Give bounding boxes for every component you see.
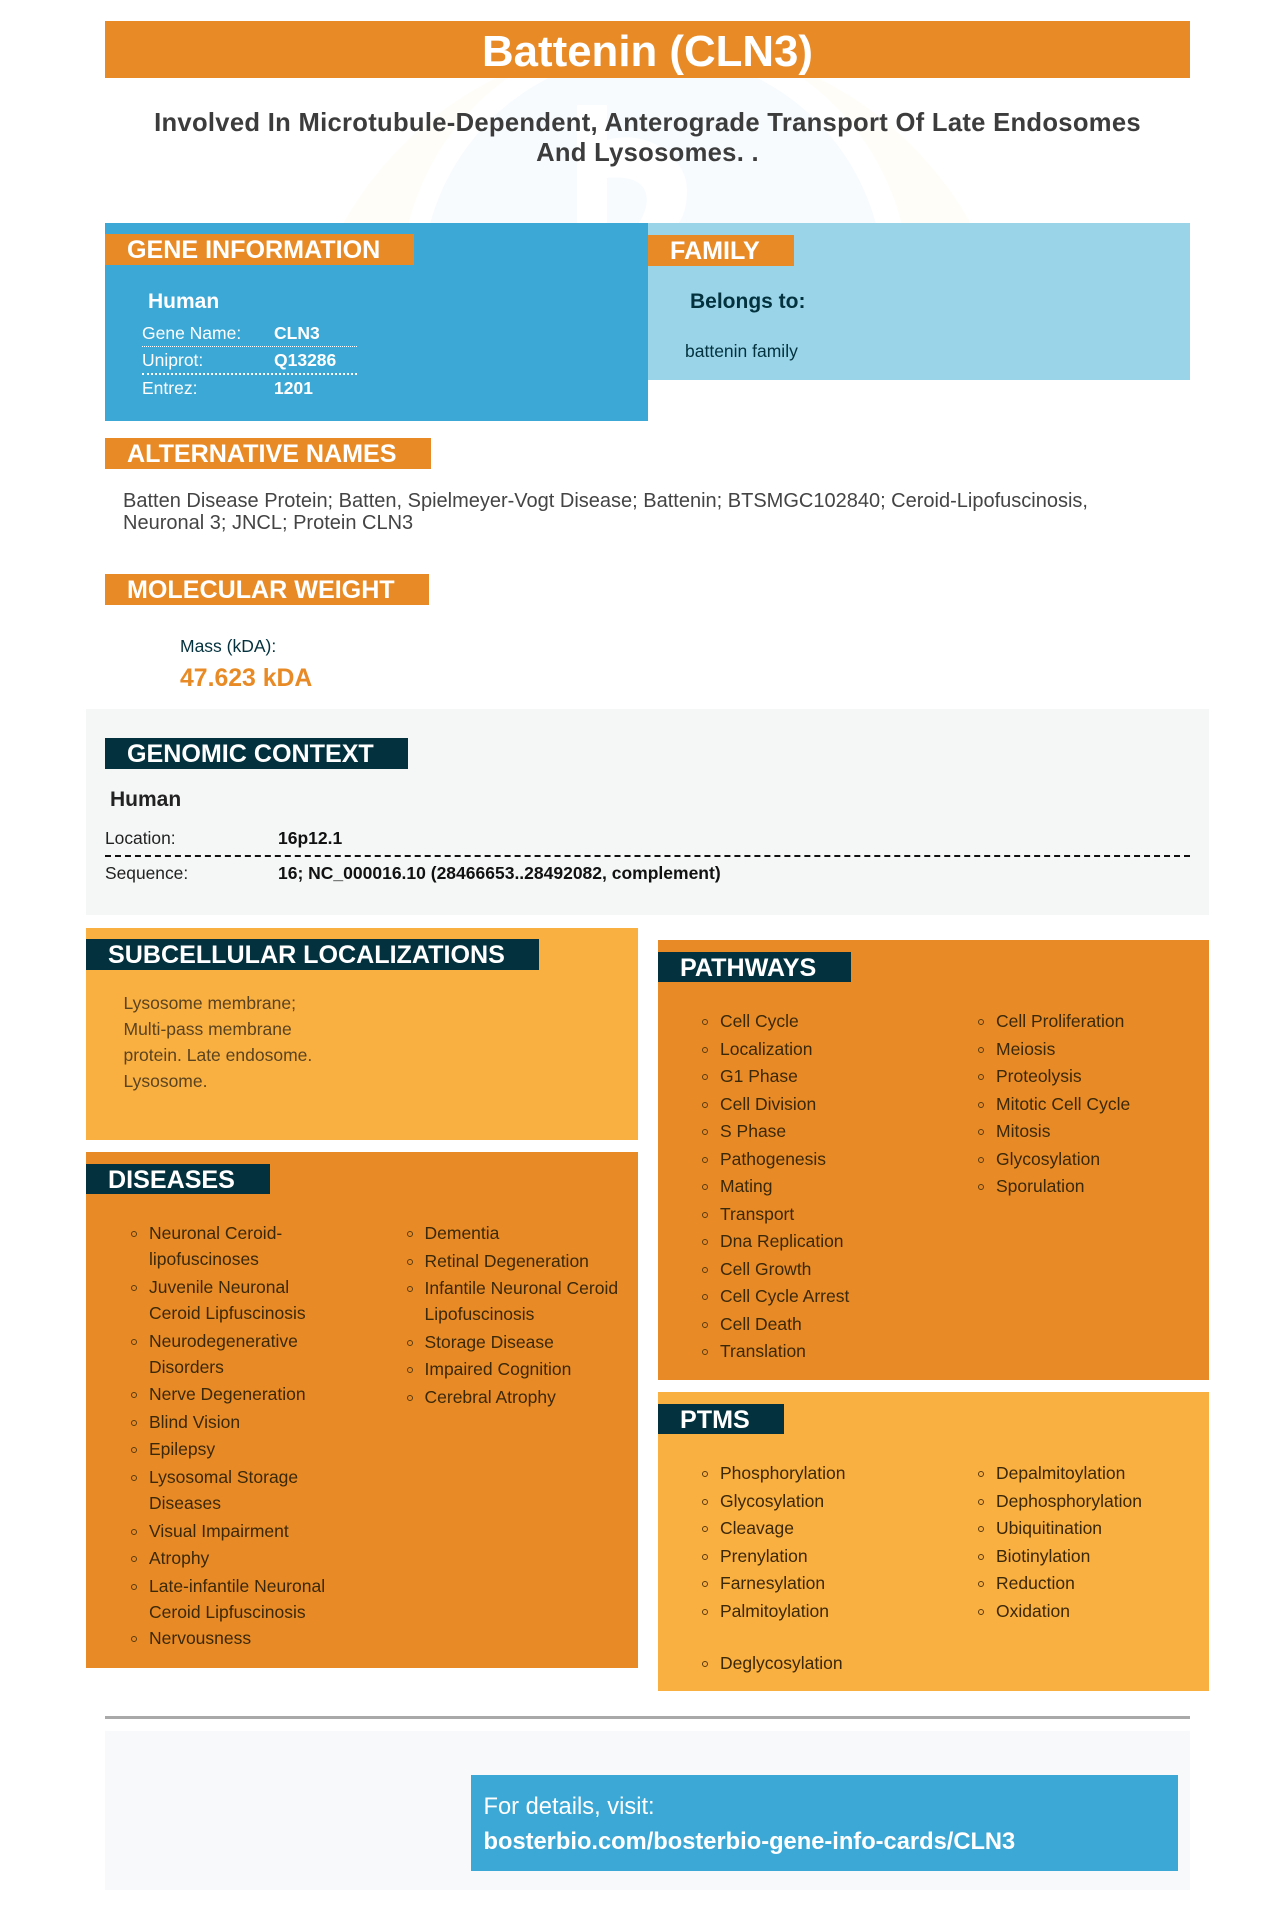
pathways list: column 1: Translation	[720, 1341, 806, 1361]
diseases list: column 2	[407, 1223, 618, 1407]
diseases list: column 1: Disorders	[149, 1357, 224, 1377]
ptms list: column 2: Oxidation	[996, 1601, 1070, 1621]
subtitle: And Lysosomes. .	[536, 138, 759, 166]
heading: alternative names: ALTERNATIVE NAMES	[127, 440, 397, 468]
ptms list: column 2	[978, 1463, 1142, 1621]
alternative names text	[123, 490, 1088, 534]
diseases list: column 2: Lipofuscinosis	[424, 1304, 534, 1324]
ptms list: column 1: Farnesylation	[720, 1573, 825, 1593]
localization text: Lysosome membrane;	[124, 993, 296, 1013]
heading: ptms	[658, 1404, 784, 1434]
gene name row: Gene Name:	[142, 323, 241, 343]
heading: pathways: PATHWAYS	[680, 954, 816, 982]
pathways list: column 2: Sporulation	[996, 1176, 1085, 1196]
uniprot row	[142, 350, 336, 370]
ptms list: column 1: Phosphorylation	[720, 1463, 846, 1483]
location row	[105, 828, 342, 848]
diseases list: column 1: Juvenile Neuronal	[149, 1277, 289, 1297]
diseases list: column 1: Atrophy	[149, 1548, 209, 1568]
heading: ptms: PTMS	[680, 1406, 750, 1434]
species label: Human	[148, 290, 219, 313]
family name: battenin family	[685, 341, 798, 361]
entrez row: Entrez:	[142, 378, 197, 398]
diseases list: column 1: Lysosomal Storage	[149, 1467, 298, 1487]
panel: ptms	[658, 1392, 1209, 1691]
pathways list: column 1: Pathogenesis	[720, 1149, 826, 1169]
entrez row	[142, 378, 313, 398]
alternative names text: Batten Disease Protein; Batten, Spielmeyer-Vogt Disease; Battenin; BTSMGC102840; Ceroid-Lipofuscinosis,	[123, 490, 1088, 512]
diseases list: column 2: Storage Disease	[424, 1332, 554, 1352]
pathways list: column 1: Mating	[720, 1176, 773, 1196]
details url: bosterbio.com/bosterbio-gene-info-cards/CLN3	[484, 1829, 1015, 1855]
ptms list: column 1: Deglycosylation	[720, 1653, 843, 1673]
footer panel	[105, 1731, 1190, 1890]
uniprot row: Q13286	[274, 350, 336, 370]
pathways list: column 2: Meiosis	[996, 1039, 1055, 1059]
heading: family: FAMILY	[670, 237, 760, 265]
alternative names text: Neuronal 3; JNCL; Protein CLN3	[123, 512, 413, 534]
pathways list: column 1: Transport	[720, 1204, 794, 1224]
subtitle	[154, 109, 1141, 166]
diseases list: column 1: Neurodegenerative	[149, 1331, 298, 1351]
diseases list: column 1: Diseases	[149, 1493, 221, 1513]
ptms list: column 2: Dephosphorylation	[996, 1491, 1142, 1511]
sequence row: 16; NC_000016.10 (28466653..28492082, complement)	[278, 863, 721, 883]
localization text	[124, 993, 312, 1091]
diseases list: column 2: Infantile Neuronal Ceroid	[424, 1278, 618, 1298]
diseases list: column 2: Impaired Cognition	[424, 1359, 571, 1379]
pathways list: column 1: Dna Replication	[720, 1231, 844, 1251]
belongs to label: Belongs to:	[690, 290, 806, 313]
diseases list: column 2: Retinal Degeneration	[424, 1251, 589, 1271]
watermark logo	[280, 78, 1040, 223]
mass label: Mass (kDA):	[180, 636, 276, 656]
pathways list: column 2: Mitotic Cell Cycle	[996, 1094, 1130, 1114]
localization text: Multi-pass membrane	[124, 1019, 292, 1039]
pathways list: column 1: Cell Division	[720, 1094, 816, 1114]
diseases list: column 1: Epilepsy	[149, 1439, 215, 1459]
diseases list: column 2: Cerebral Atrophy	[424, 1387, 556, 1407]
pathways list: column 1: S Phase	[720, 1121, 786, 1141]
ptms list: column 1: Palmitoylation	[720, 1601, 829, 1621]
heading: diseases: DISEASES	[108, 1166, 235, 1194]
pathways list: column 1: G1 Phase	[720, 1066, 798, 1086]
panel: diseases	[86, 1152, 638, 1668]
title: Battenin (CLN3)	[482, 27, 813, 76]
pathways list: column 2	[978, 1011, 1130, 1196]
ptms list: column 2: Ubiquitination	[996, 1518, 1102, 1538]
pathways list: column 2: Proteolysis	[996, 1066, 1082, 1086]
gene name row	[142, 323, 320, 343]
ptms list: column 2: Biotinylation	[996, 1546, 1090, 1566]
panel: genomic context	[86, 709, 1209, 915]
pathways list: column 1	[702, 1011, 850, 1361]
diseases list: column 1	[131, 1223, 325, 1648]
heading: subcellular localizations: SUBCELLULAR LOCALIZATIONS	[108, 941, 505, 969]
details label: For details, visit:	[484, 1794, 655, 1820]
ptms list: column 2: Depalmitoylation	[996, 1463, 1125, 1483]
diseases list: column 1: Neuronal Ceroid-	[149, 1223, 282, 1243]
panel: subcellular localizations	[86, 928, 638, 1140]
pathways list: column 1: Cell Cycle Arrest	[720, 1286, 849, 1306]
diseases list: column 2: Dementia	[424, 1223, 499, 1243]
mass value: 47.623 kDA	[180, 665, 312, 692]
diseases list: column 1: Ceroid Lipfuscinosis	[149, 1303, 306, 1323]
entrez row: 1201	[274, 378, 313, 398]
callout: details link	[471, 1775, 1178, 1871]
location row: 16p12.1	[278, 828, 342, 848]
localization text: protein. Late endosome.	[124, 1045, 312, 1065]
pathways list: column 1: Cell Death	[720, 1314, 802, 1334]
title	[105, 21, 1190, 78]
pathways list: column 2: Glycosylation	[996, 1149, 1100, 1169]
ptms list: column 1: Cleavage	[720, 1518, 794, 1538]
ptms list: column 1: Glycosylation	[720, 1491, 824, 1511]
diseases list: column 1: lipofuscinoses	[149, 1249, 259, 1269]
gene name row: CLN3	[274, 323, 320, 343]
uniprot row: Uniprot:	[142, 350, 203, 370]
pathways list: column 1: Cell Cycle	[720, 1011, 799, 1031]
location row: Location:	[105, 828, 176, 848]
panel: gene information	[105, 223, 648, 421]
diseases list: column 1: Nervousness	[149, 1628, 251, 1648]
heading: diseases	[86, 1164, 270, 1194]
ptms list: column 2: Reduction	[996, 1573, 1075, 1593]
localization text: Lysosome.	[124, 1071, 207, 1091]
heading: genomic context: GENOMIC CONTEXT	[127, 740, 374, 768]
pathways list: column 2: Mitosis	[996, 1121, 1050, 1141]
heading: gene information: GENE INFORMATION	[127, 236, 380, 264]
pathways list: column 1: Cell Growth	[720, 1259, 811, 1279]
diseases list: column 1: Nerve Degeneration	[149, 1384, 306, 1404]
panel: family	[648, 223, 1190, 380]
pathways list: column 1: Localization	[720, 1039, 812, 1059]
species label: Human	[110, 788, 181, 811]
diseases list: column 1: Ceroid Lipfuscinosis	[149, 1602, 306, 1622]
heading: molecular weight: MOLECULAR WEIGHT	[127, 576, 395, 604]
ptms list: column 1	[702, 1463, 846, 1673]
pathways list: column 2: Cell Proliferation	[996, 1011, 1124, 1031]
subtitle: Involved In Microtubule-Dependent, Anterograde Transport Of Late Endosomes	[154, 109, 1141, 137]
ptms list: column 1: Prenylation	[720, 1546, 808, 1566]
diseases list: column 1: Late-infantile Neuronal	[149, 1576, 325, 1596]
heading: family	[648, 235, 794, 266]
panel: pathways	[658, 940, 1209, 1380]
heading: pathways	[658, 952, 851, 982]
diseases list: column 1: Visual Impairment	[149, 1521, 289, 1541]
diseases list: column 1: Blind Vision	[149, 1412, 240, 1432]
sequence row: Sequence:	[105, 863, 188, 883]
